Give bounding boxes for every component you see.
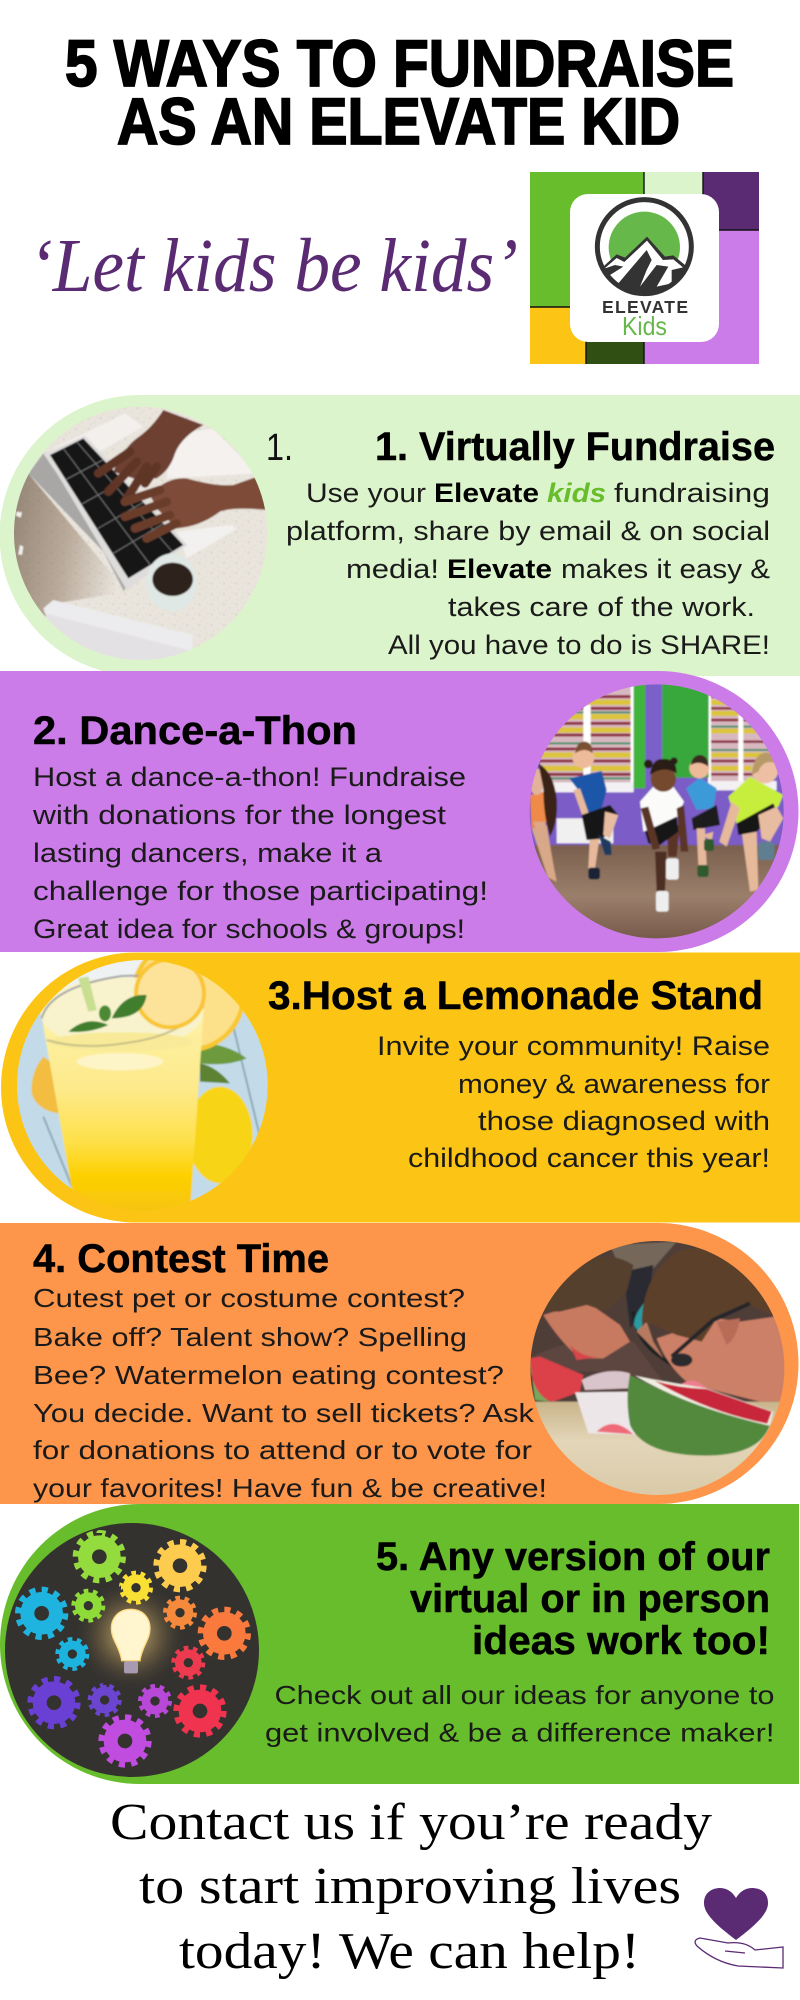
closing call to action xyxy=(110,1794,712,1980)
panel background xyxy=(0,1504,799,1784)
body text: Host a dance-a-thon! Fundraise xyxy=(33,762,466,792)
panel: 2 dance-a-thon xyxy=(0,671,798,952)
icon: heart in hand xyxy=(695,1888,783,1968)
body text xyxy=(33,1283,547,1503)
body text xyxy=(265,1680,774,1748)
body text: challenge for those participating! xyxy=(33,876,488,906)
panel background xyxy=(0,1223,798,1504)
photo: glass of lemonade xyxy=(17,960,268,1202)
body text: Check out all our ideas for anyone to xyxy=(274,1680,774,1710)
closing call to action: Contact us if you’re ready xyxy=(110,1794,712,1851)
kid light-blue xyxy=(686,778,717,810)
body text: with donations for the longest xyxy=(32,800,447,830)
panel: 4 contest time xyxy=(0,1223,798,1504)
panel: 5 any version xyxy=(0,1504,799,1784)
body text: Great idea for schools & groups! xyxy=(33,914,465,944)
heading: 4. Contest Time xyxy=(33,1237,329,1281)
body text: platform, share by email & on social xyxy=(286,516,770,546)
panel background xyxy=(1,952,800,1222)
closing call to action: today! We can help! xyxy=(179,1923,640,1980)
body text xyxy=(286,478,770,660)
body text: Elevate xyxy=(447,554,552,584)
body text: Invite your community! Raise xyxy=(377,1031,770,1061)
kid centre xyxy=(655,852,667,892)
photo: watermelon eating contest xyxy=(530,1241,784,1495)
logo card: ELEVATE xyxy=(602,297,688,317)
panel background xyxy=(0,395,800,676)
body text: get involved & be a difference maker! xyxy=(265,1718,774,1748)
colour blocks xyxy=(530,172,759,364)
body text: your favorites! Have fun & be creative! xyxy=(33,1473,547,1503)
heading xyxy=(376,1535,770,1663)
body text: childhood cancer this year! xyxy=(408,1143,770,1173)
photo: hands typing on laptop xyxy=(14,406,268,660)
body text xyxy=(377,1031,770,1173)
body text: fundraising xyxy=(614,478,770,508)
body text: Bake off? Talent show? Spelling xyxy=(33,1322,467,1352)
heading: 5. Any version of our xyxy=(376,1535,770,1579)
body text: for donations to attend or to vote for xyxy=(33,1435,532,1465)
body text: money & awareness for xyxy=(458,1069,770,1099)
title: 5 WAYS TO FUNDRAISE xyxy=(65,26,734,100)
photo: children dancing xyxy=(530,684,784,938)
body text: Use your xyxy=(306,478,426,508)
body text xyxy=(32,762,488,944)
kid yellow xyxy=(742,832,758,892)
body text: those diagnosed with xyxy=(478,1106,770,1136)
body text: All you have to do is SHARE! xyxy=(388,630,770,660)
body text: Elevate xyxy=(434,478,539,508)
tagline: ‘Let kids be kids’ xyxy=(29,224,518,308)
closing call to action: to start improving lives xyxy=(139,1858,681,1915)
body text: lasting dancers, make it a xyxy=(33,838,383,868)
logo card: Kids xyxy=(622,311,667,341)
body text: Bee? Watermelon eating contest? xyxy=(33,1360,504,1390)
heading: 3.Host a Lemonade Stand xyxy=(268,974,763,1018)
title: AS AN ELEVATE KID xyxy=(117,84,680,158)
title xyxy=(65,26,734,158)
body text: kids xyxy=(547,478,606,508)
kid blue xyxy=(588,835,600,868)
body text: media! xyxy=(346,554,439,584)
logo card xyxy=(570,194,719,342)
heading: 1. Virtually Fundraise xyxy=(375,425,775,469)
panel background xyxy=(0,671,798,952)
panel: 3 lemonade stand xyxy=(1,938,800,1222)
body text: You decide. Want to sell tickets? Ask xyxy=(33,1398,535,1428)
photo: colourful gears and light bulb xyxy=(0,1520,267,1783)
body text: Cutest pet or costume contest? xyxy=(33,1283,465,1313)
heading: 2. Dance-a-Thon xyxy=(33,709,357,753)
kid left xyxy=(530,792,548,828)
logo block xyxy=(530,172,759,364)
number stray label: 1. xyxy=(266,427,293,469)
heading: virtual or in person xyxy=(410,1577,770,1621)
body text: makes it easy & xyxy=(561,554,770,584)
panel: 1 virtually fundraise xyxy=(0,395,800,676)
heading: ideas work too! xyxy=(472,1619,770,1663)
body text: takes care of the work. xyxy=(448,592,755,622)
